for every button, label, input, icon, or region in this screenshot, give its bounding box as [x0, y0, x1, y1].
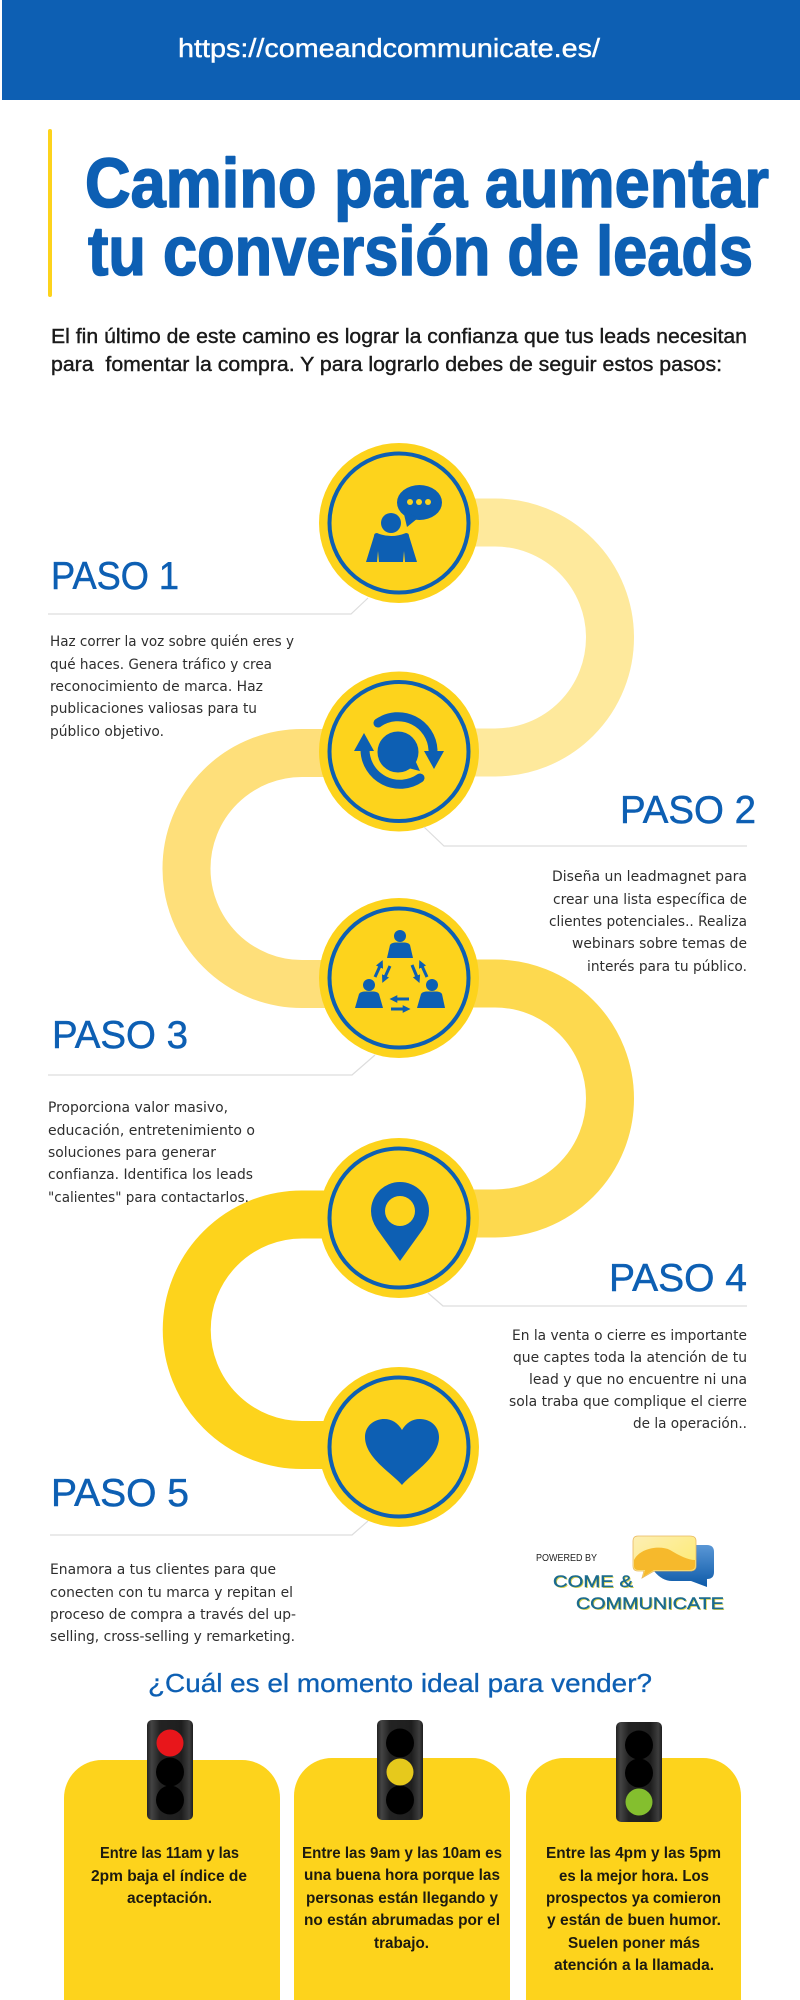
- paso 3 text: Proporciona valor masivo,: [48, 1100, 228, 1116]
- paso 3 text: soluciones para generar: [48, 1145, 216, 1161]
- card: green light: Entre las 4pm y las 5pm: [546, 1845, 721, 1862]
- paso 4 text: que captes toda la atención de tu: [513, 1350, 747, 1366]
- icon: three people exchanging: [355, 930, 445, 1009]
- icon: heart: [365, 1419, 439, 1485]
- logo: powered by come & communicate: COME &: [553, 1572, 634, 1591]
- paso 2 text: [424, 789, 756, 975]
- intro text: [51, 326, 747, 376]
- paso 1 text: [48, 555, 368, 740]
- icon: blue speech bubble: [654, 1545, 714, 1587]
- icon: chat with cycle arrows: [354, 717, 444, 784]
- card: green light: atención a la llamada.: [554, 1957, 714, 1974]
- card: red light: aceptación.: [127, 1890, 212, 1907]
- paso 3 text: educación, entretenimiento o: [48, 1123, 255, 1139]
- card: red light: Entre las 11am y las: [100, 1845, 239, 1862]
- logo: powered by come & communicate: [536, 1536, 725, 1614]
- icon: traffic light red: [147, 1720, 193, 1820]
- paso 2 text: clientes potenciales.. Realiza: [549, 914, 747, 930]
- card: green light: y están de buen humor.: [547, 1912, 721, 1929]
- paso 4 text: de la operación..: [633, 1416, 747, 1432]
- paso 3 text: confianza. Identifica los leads: [48, 1167, 253, 1183]
- paso 2 text: PASO 2: [620, 789, 756, 832]
- paso 2 text: webinars sobre temas de: [572, 936, 747, 952]
- card: yellow light: no están abrumadas por el: [304, 1912, 500, 1929]
- bottom heading: ¿Cuál es el momento ideal para vender?: [148, 1668, 652, 1698]
- icon: traffic light green: [616, 1722, 662, 1822]
- card: green light: prospectos ya comieron: [546, 1890, 721, 1907]
- header banner: [2, 0, 800, 100]
- paso 1 text: qué haces. Genera tráfico y crea: [50, 657, 272, 673]
- step 2 circle: [319, 672, 479, 832]
- paso 5 text: conecten con tu marca y repitan el: [50, 1585, 293, 1601]
- paso 5 text: proceso de compra a través del up-: [50, 1607, 296, 1623]
- paso 4 text: [428, 1257, 747, 1432]
- step 5 circle: [319, 1367, 479, 1527]
- icon: person speaking: [366, 485, 442, 562]
- paso 1 text: público objetivo.: [50, 724, 164, 740]
- card: yellow light: trabajo.: [374, 1935, 429, 1952]
- card: yellow light: una buena hora porque las: [304, 1867, 500, 1884]
- icon: traffic light yellow: [377, 1720, 423, 1820]
- icon: yellow speech bubble: [633, 1536, 696, 1578]
- paso 5 text: [50, 1472, 368, 1645]
- paso 2 text: crear una lista específica de: [553, 892, 747, 908]
- paso 1 text: Haz correr la voz sobre quién eres y: [50, 634, 294, 650]
- paso 3 text: [48, 1014, 375, 1206]
- paso 5 text: selling, cross-selling y remarketing.: [50, 1629, 295, 1645]
- logo: powered by come & communicate: COMMUNICATE: [576, 1594, 724, 1613]
- paso 5 text: PASO 5: [51, 1472, 189, 1515]
- logo: powered by come & communicate: POWERED BY: [536, 1552, 597, 1564]
- step 4 circle: [319, 1138, 479, 1298]
- paso 4 text: sola traba que complique el cierre: [509, 1394, 747, 1410]
- paso 5 text: Enamora a tus clientes para que: [50, 1562, 276, 1578]
- card: green light: [526, 1722, 741, 2000]
- card: green light: es la mejor hora. Los: [559, 1868, 709, 1885]
- paso 1 text: PASO 1: [51, 555, 179, 598]
- paso 3 text: "calientes" para contactarlos.: [48, 1190, 249, 1206]
- paso 1 text: publicaciones valiosas para tu: [50, 701, 257, 717]
- card: red light: 2pm baja el índice de: [91, 1868, 247, 1885]
- card: yellow light: personas están llegando y: [306, 1890, 498, 1907]
- website url: https://comeandcommunicate.es/: [178, 33, 601, 63]
- step 3 circle: [319, 898, 479, 1058]
- icon: location pin: [371, 1182, 429, 1261]
- card: yellow light: [294, 1720, 510, 2000]
- paso 4 text: En la venta o cierre es importante: [512, 1328, 747, 1344]
- intro text: El fin último de este camino es lograr la confianza que tus leads necesitan: [51, 326, 747, 348]
- paso 3 text: PASO 3: [52, 1014, 188, 1057]
- paso 2 text: Diseña un leadmagnet para: [552, 869, 747, 885]
- logo: powered by come & communicate: COMMUNICATE: [577, 1595, 725, 1614]
- winding path: [186, 522, 610, 1445]
- card: yellow light: Entre las 9am y las 10am es: [302, 1845, 502, 1862]
- intro text: para fomentar la compra. Y para lograrlo debes de seguir estos pasos:: [51, 354, 722, 376]
- logo: powered by come & communicate: COME &: [554, 1573, 635, 1592]
- card: red light: [64, 1720, 280, 2000]
- title block: [48, 129, 769, 297]
- paso 4 text: PASO 4: [609, 1257, 747, 1300]
- card: green light: Suelen poner más: [568, 1935, 700, 1952]
- step 1 circle: [319, 443, 479, 603]
- paso 4 text: lead y que no encuentre ni una: [529, 1372, 747, 1388]
- paso 1 text: reconocimiento de marca. Haz: [50, 679, 263, 695]
- paso 2 text: interés para tu público.: [587, 959, 747, 975]
